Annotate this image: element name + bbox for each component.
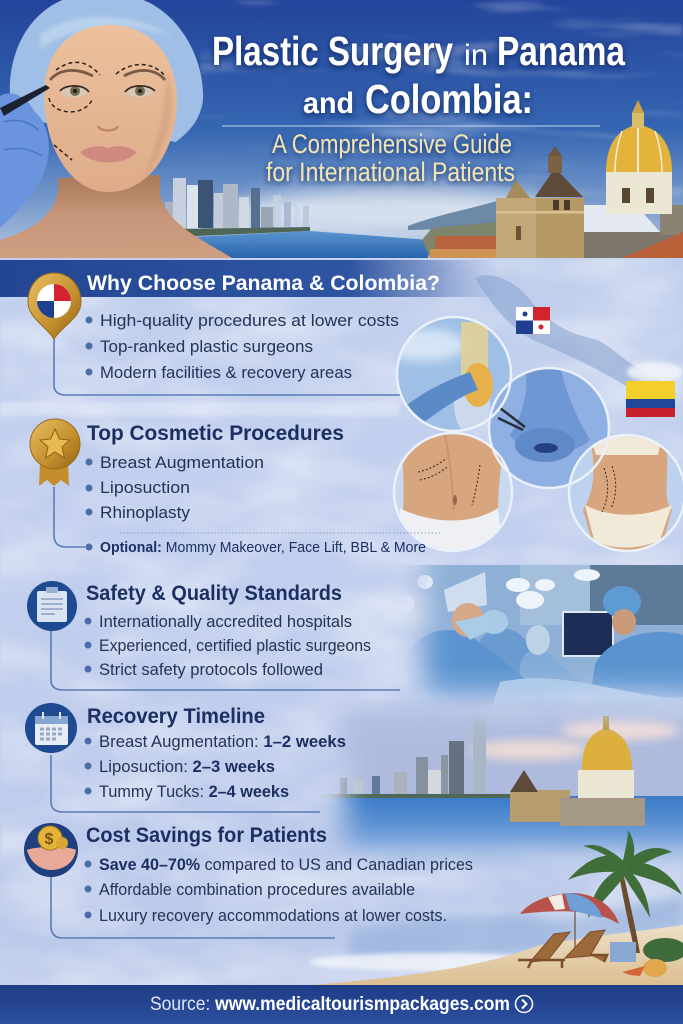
bullet list: Top-ranked plastic surgeons xyxy=(100,337,313,356)
flag: Colombia xyxy=(626,381,675,417)
panel: header banner xyxy=(0,0,683,258)
header clouds xyxy=(200,0,683,258)
bullet list: Breast Augmentation xyxy=(100,453,264,472)
sunset sky xyxy=(336,704,683,796)
surf foam xyxy=(310,953,550,971)
image: operating room scene xyxy=(390,565,683,712)
beach gifts and shell xyxy=(610,942,667,977)
lounge chairs xyxy=(518,930,607,968)
lips xyxy=(80,146,137,162)
bullet list: Strict safety protocols followed xyxy=(99,660,323,679)
bullet list xyxy=(84,612,371,679)
surgical lamps xyxy=(407,569,600,612)
cap highlight xyxy=(40,17,175,50)
title xyxy=(210,36,628,119)
skyline xyxy=(320,718,510,798)
image: beach scene xyxy=(310,830,683,985)
distant hills xyxy=(408,201,497,230)
title divider xyxy=(222,125,600,127)
heading: Safety & Quality Standards xyxy=(86,582,342,605)
optional procedures note: Optional: Mommy Makeover, Face Lift, BBL & More xyxy=(100,540,426,556)
church and dome xyxy=(510,716,645,826)
subtitle xyxy=(266,129,515,187)
marking pen xyxy=(0,85,50,116)
subtitle: A Comprehensive Guide xyxy=(272,129,512,159)
heading: Top Cosmetic Procedures xyxy=(87,422,344,445)
bullet list xyxy=(86,311,399,382)
circle: nose xyxy=(490,369,608,487)
bullet list: High-quality procedures at lower costs xyxy=(100,311,399,330)
heading: Why Choose Panama & Colombia? xyxy=(87,272,440,295)
bullet list: Liposuction xyxy=(100,478,190,497)
bullet list: Rhinoplasty xyxy=(100,503,191,522)
shrubs xyxy=(643,938,683,962)
bullet list: Luxury recovery accommodations at lower costs. xyxy=(99,906,447,925)
bullet list: Save 40–70% compared to US and Canadian prices xyxy=(99,855,473,874)
icon: coins in hands xyxy=(24,823,78,877)
source text: Source: www.medicaltourismpackages.com xyxy=(150,994,510,1015)
right surgeon xyxy=(590,632,683,697)
decorative map of Central America xyxy=(475,275,660,395)
circle: breast implant xyxy=(398,318,510,430)
assistant surgeons xyxy=(480,629,530,675)
circle: torso markings right xyxy=(568,434,683,552)
Panama skyline xyxy=(165,178,310,236)
distant sea swell xyxy=(350,895,683,965)
bullet list: Modern facilities & recovery areas xyxy=(100,363,352,382)
connector bracket xyxy=(54,487,85,547)
section: top cosmetic procedures xyxy=(30,419,440,556)
sea xyxy=(300,796,683,876)
heading: Recovery Timeline xyxy=(87,705,265,728)
bullet list xyxy=(84,732,346,801)
title: Plastic Surgery xyxy=(212,28,453,74)
bullet list: Experienced, certified plastic surgeons xyxy=(99,636,371,655)
header sky xyxy=(0,0,683,258)
connector bracket xyxy=(51,630,400,690)
light band between sections xyxy=(0,402,400,416)
bullet list: Internationally accredited hospitals xyxy=(99,612,352,631)
bullet list xyxy=(86,453,264,522)
title: and xyxy=(303,87,354,120)
left surgeon xyxy=(412,630,524,704)
circle outlines xyxy=(394,317,683,551)
white cloud near Colombia xyxy=(627,362,683,382)
surgical marking lines xyxy=(49,62,165,160)
bullet list: Affordable combination procedures available xyxy=(99,880,415,899)
rooftops xyxy=(435,236,497,249)
connector bracket xyxy=(51,755,320,812)
title: in xyxy=(464,39,488,72)
Cartagena church xyxy=(496,146,584,258)
sand xyxy=(310,925,683,985)
neck and shoulders xyxy=(0,175,232,258)
beach umbrella xyxy=(520,893,619,950)
icon: arrow circle xyxy=(516,996,532,1012)
circle: torso markings left xyxy=(400,434,510,550)
glove fingers xyxy=(4,120,42,156)
section: cost savings xyxy=(24,823,473,938)
palm tree xyxy=(568,830,682,953)
cloud texture xyxy=(0,258,683,988)
section heading band xyxy=(0,260,500,297)
gloved hand xyxy=(0,93,49,228)
bullet list: Tummy Tucks: 2–4 weeks xyxy=(99,782,289,801)
bullet list xyxy=(84,855,473,925)
face xyxy=(44,25,177,192)
surgeon's scrub cap xyxy=(10,0,203,142)
icon: coins in hands: $ xyxy=(44,831,54,848)
horizon glow xyxy=(230,188,570,236)
bay water xyxy=(195,231,430,258)
icon: clipboard badge xyxy=(27,581,77,631)
subtitle: for International Patients xyxy=(266,157,515,187)
cathedral dome xyxy=(584,100,683,258)
icon: gold medal xyxy=(30,419,80,486)
connector bracket xyxy=(54,338,400,395)
title: Panama xyxy=(497,28,626,74)
bullet list: Breast Augmentation: 1–2 weeks xyxy=(99,732,346,751)
icon: calendar badge xyxy=(25,703,77,753)
image: coastal city and sea xyxy=(323,704,683,864)
bullet list: Liposuction: 2–3 weeks xyxy=(99,757,275,776)
brows, eyes and nose xyxy=(50,70,165,130)
heading: Cost Savings for Patients xyxy=(86,824,327,847)
section: recovery timeline xyxy=(25,703,346,812)
flag: Panama xyxy=(516,307,550,334)
section: safety and quality xyxy=(27,581,400,690)
title: Colombia: xyxy=(365,76,533,122)
dotted divider xyxy=(120,532,440,534)
monitor xyxy=(563,612,613,656)
icon: map pin with Panama flag xyxy=(28,273,81,339)
footer bar xyxy=(0,985,683,1024)
section: why choose xyxy=(28,272,440,395)
connector bracket xyxy=(51,877,335,938)
face shading xyxy=(151,79,172,162)
surgical drape xyxy=(492,678,662,705)
procedure circles group xyxy=(385,315,683,554)
